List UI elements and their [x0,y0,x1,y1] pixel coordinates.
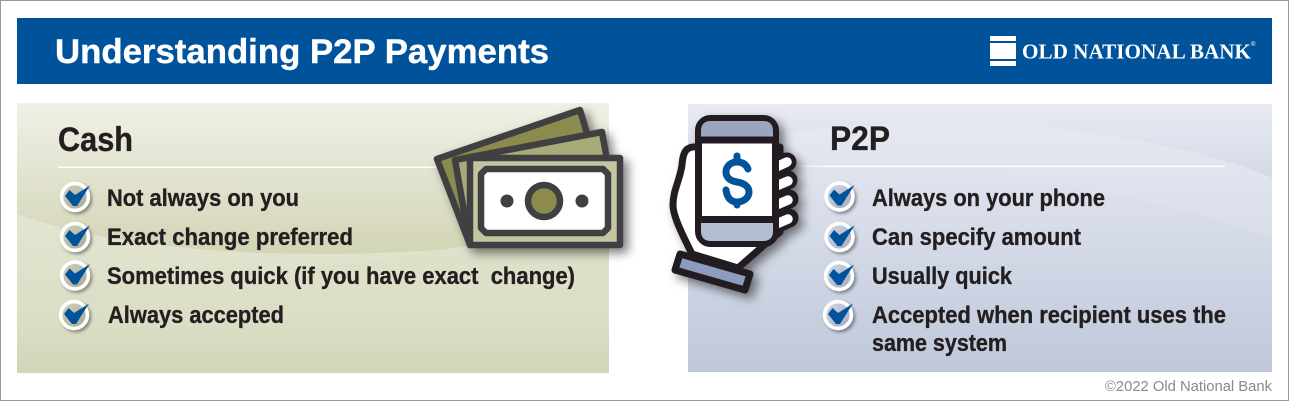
icon: hand holding phone [673,118,790,290]
item: accepted when recipient uses the same system: same system [872,330,1007,357]
item: usually quick: Usually quick [872,263,1013,290]
heading: P2P: P2P [830,120,890,158]
item: exact change preferred: Exact change preferred [107,224,353,251]
item: accepted when recipient uses the same system [872,302,1226,357]
dollar sign [726,156,749,205]
fingers [772,162,790,236]
item: always accepted: Always accepted [108,302,284,329]
check icons: cash [61,184,90,328]
panel: cash [17,103,609,373]
item: sometimes quick: Sometimes quick (if you have exact change) [107,263,575,290]
hand [673,147,780,268]
title: Understanding P2P Payments [55,33,549,71]
item: accepted when recipient uses the same system: Accepted when recipient uses the [872,302,1226,329]
logo: Old National Bank: OLD NATIONAL BANK [1022,40,1251,64]
check icons: P2P [825,183,854,328]
list: P2P points [872,185,1226,357]
item: not always on you: Not always on you [107,185,299,212]
item: can specify amount: Can specify amount [872,224,1081,251]
list: cash points [107,185,575,329]
heading: Cash: Cash [58,121,133,159]
item: always on your phone: Always on your phone [872,185,1105,212]
copyright: ©2022 Old National Bank [1105,379,1273,395]
phone [698,118,776,244]
panel: P2P [688,104,1272,372]
logo: Old National Bank: ® [1251,41,1256,48]
header banner [17,18,1272,84]
cuff [675,254,750,290]
logo: Old National Bank [990,36,1256,66]
icon: cash bills [437,110,620,245]
